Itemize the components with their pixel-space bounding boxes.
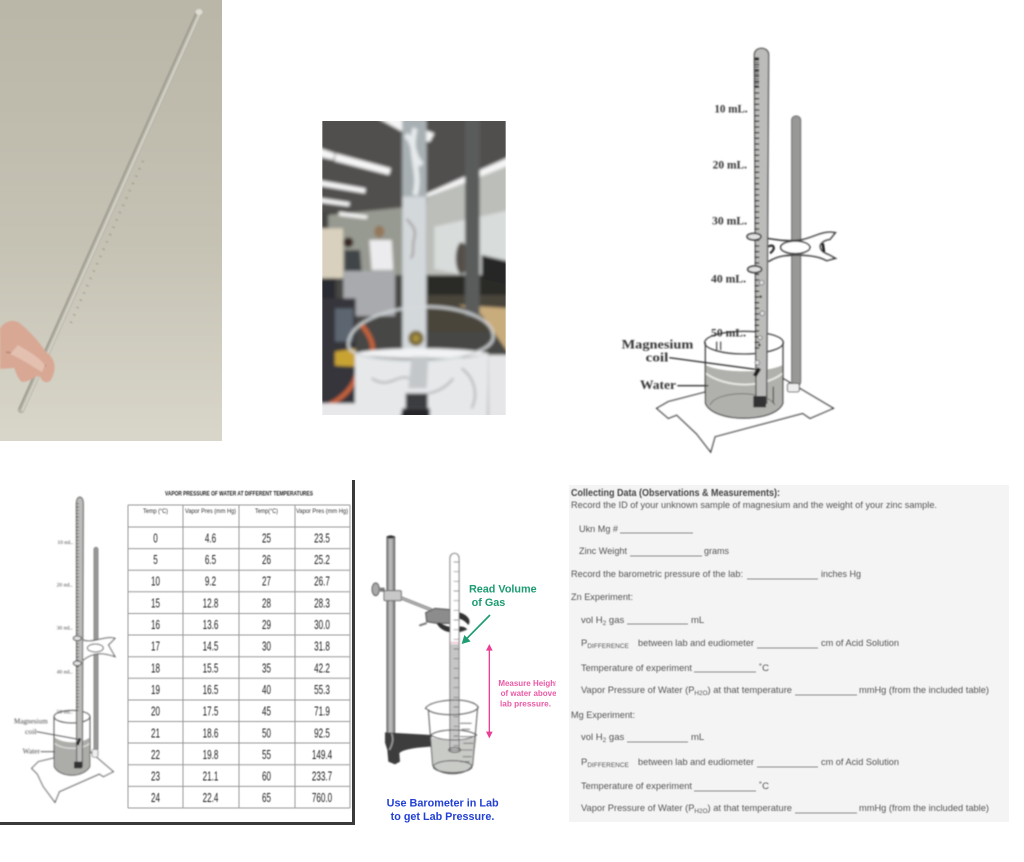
small burette diagram: 20 mL.: [57, 583, 73, 589]
label: magnesium coil and water: [622, 337, 755, 392]
table: vapor pressure of water: 5: [153, 553, 158, 568]
table: vapor pressure of water: 13.6: [203, 618, 219, 633]
table: vapor pressure of water: 40: [262, 683, 271, 698]
panel frame: [0, 480, 354, 824]
small burette diagram: 10 mL.: [57, 540, 74, 546]
small burette diagram: Magnesium: [14, 717, 48, 725]
burette tube: [753, 48, 769, 407]
table: vapor pressure of water: 29: [262, 618, 271, 633]
label: use barometer: [387, 798, 499, 823]
magnesium experiment fields: H2O: [694, 808, 708, 815]
table: vapor pressure of water: 15.5: [203, 662, 219, 676]
small burette diagram: 40 mL.: [57, 669, 73, 675]
magnesium experiment fields: P: [581, 757, 587, 768]
label: read volume of gas: [469, 584, 537, 609]
zinc experiment fields: Temperature of experiment: [581, 663, 692, 674]
zinc experiment fields: P: [581, 638, 587, 649]
label: magnesium coil and water: Water: [640, 378, 676, 392]
hand: [0, 321, 55, 382]
table: vapor pressure of water: 10: [151, 575, 160, 589]
volume labels: 20 mL.: [713, 159, 747, 171]
zinc experiment fields: DIFFERENCE: [587, 643, 630, 650]
magnesium experiment fields: cm of Acid Solution: [821, 757, 899, 768]
table: vapor pressure of water: 35: [262, 662, 271, 676]
zinc experiment fields: H2O: [694, 690, 708, 697]
label: read volume of gas: Read Volume: [469, 584, 537, 596]
zinc experiment fields: vol H: [581, 615, 603, 626]
zinc experiment fields: between lab and eudiometer: [638, 638, 754, 649]
table: vapor pressure of water: 92.5: [314, 727, 330, 741]
table: vapor pressure of water: 149.4: [312, 748, 332, 763]
zinc experiment fields: 2: [603, 620, 607, 627]
table: vapor pressure of water: 6.5: [205, 553, 216, 568]
table: vapor pressure of water: 26.7: [314, 575, 330, 589]
label: use barometer: Use Barometer in Lab: [387, 798, 499, 810]
form heading: Collecting Data (Observations & Measurements):: [571, 488, 780, 499]
volume labels: 40 mL.: [711, 274, 746, 286]
table: vapor pressure of water: 71.9: [314, 705, 330, 719]
magnesium experiment fields: between lab and eudiometer: [638, 757, 754, 768]
panel: collecting data form: [569, 485, 1009, 822]
table: vapor pressure of water: 17.5: [203, 705, 219, 719]
sample fields: [571, 524, 861, 580]
magnesium experiment fields: ˚C: [759, 781, 769, 792]
sample fields: Record the barometric pressure of the lab:: [571, 569, 743, 580]
table: vapor pressure of water: 26: [262, 553, 271, 568]
magnesium experiment fields: mL: [691, 732, 704, 743]
table: vapor pressure of water: 22: [151, 748, 160, 763]
sample fields: grams: [704, 546, 729, 557]
arrow: height of water: [486, 644, 493, 738]
table: vapor pressure of water: 50: [262, 727, 271, 741]
clamp: [747, 232, 835, 273]
label: use barometer: to get Lab Pressure.: [391, 811, 494, 823]
magnesium experiment fields: mmHg (from the included table): [859, 803, 989, 814]
clamp: [372, 583, 470, 633]
table: vapor pressure of water: 233.7: [312, 770, 332, 784]
eudiometer tube: [19, 9, 202, 411]
small burette diagram: [14, 497, 115, 802]
table: vapor pressure of water: 19.8: [203, 748, 219, 763]
table: vapor pressure of water: 4.6: [205, 532, 216, 546]
zinc experiment fields: Vapor Pressure of Water (P: [581, 685, 697, 696]
table: vapor pressure of water: 28.3: [314, 597, 330, 611]
label: measure height of water: of water above: [501, 689, 557, 698]
support rod: [792, 116, 801, 386]
zinc experiment fields: ) at that temperature: [708, 685, 792, 696]
table: vapor pressure of water: 55.3: [314, 683, 330, 698]
label: magnesium coil and water: Magnesium: [622, 337, 694, 351]
ring stand rod: [387, 537, 395, 733]
label: measure height of water: lab pressure.: [500, 700, 551, 709]
magnesium experiment fields: vol H: [581, 732, 603, 743]
panel: apparatus and vapor pressure table: [0, 480, 354, 824]
photo: hand holding eudiometer tube: [0, 0, 227, 446]
label: measure height of water: Measure Height: [498, 679, 558, 688]
table: vapor pressure of water: 0: [153, 532, 158, 546]
eudiometer: [402, 117, 426, 350]
beaker outline: [425, 700, 478, 774]
sample fields: Ukn Mg #: [579, 524, 619, 535]
table: vapor pressure of water: 18.6: [203, 727, 219, 741]
table: vapor pressure of water: 28: [262, 597, 271, 611]
table: vapor pressure of water: 23.5: [314, 532, 330, 546]
beaker: [348, 307, 493, 420]
small burette diagram: 30 mL.: [57, 625, 73, 631]
zinc experiment fields: [571, 592, 989, 697]
table: vapor pressure of water: Temp (°C): [143, 508, 168, 515]
magnesium experiment fields: Temperature of experiment: [581, 781, 692, 792]
zinc experiment fields: mmHg (from the included table): [859, 685, 989, 696]
form instructions: Record the ID of your unknown sample of magnesium and the weight of your zinc sample.: [571, 500, 937, 511]
arrow: read volume: [462, 615, 490, 644]
table: vapor pressure of water: 30.0: [314, 618, 330, 633]
label: measure height of water: [498, 679, 558, 709]
stand foot: [385, 732, 432, 764]
label: read volume of gas: of Gas: [472, 597, 505, 609]
table: vapor pressure of water: Temp(°C): [255, 508, 278, 515]
table: vapor pressure of water: 16: [151, 618, 160, 633]
volume labels: 50 mL.: [711, 328, 746, 340]
small burette diagram: 50 mL.: [57, 709, 73, 715]
table: vapor pressure of water: 18: [151, 662, 160, 676]
zinc experiment fields: ˚C: [759, 663, 769, 674]
gas measuring tube: [449, 553, 461, 752]
table: vapor pressure of water: 16.5: [203, 683, 219, 698]
magnesium experiment fields: Mg Experiment:: [571, 710, 635, 721]
table: vapor pressure of water: 25: [262, 532, 271, 546]
sample fields: Zinc Weight: [579, 546, 627, 557]
table: vapor pressure of water: 30: [262, 640, 271, 654]
table: vapor pressure of water: 27: [262, 575, 271, 589]
zinc experiment fields: cm of Acid Solution: [821, 638, 899, 649]
table: vapor pressure of water: 65: [262, 791, 271, 806]
table: vapor pressure of water: 760.0: [312, 791, 332, 806]
magnesium experiment fields: 2: [603, 737, 607, 744]
table: vapor pressure of water: 12.8: [203, 597, 219, 611]
table: vapor pressure of water: 45: [262, 705, 271, 719]
small burette diagram: Water: [23, 747, 41, 755]
volume labels: [711, 104, 748, 340]
sample fields: inches Hg: [821, 569, 861, 580]
table: vapor pressure of water: 24: [151, 791, 160, 806]
magnesium experiment fields: gas: [606, 732, 624, 743]
zinc experiment fields: mL: [691, 615, 704, 626]
table: vapor pressure of water: 55: [262, 748, 271, 763]
table: vapor pressure of water: 42.2: [314, 662, 330, 676]
table: vapor pressure of water: 60: [262, 770, 271, 784]
table: vapor pressure of water: Vapor Pres (mm Hg): [185, 508, 236, 515]
table: vapor pressure of water: 21.1: [203, 770, 219, 784]
table title: VAPOR PRESSURE OF WATER AT DIFFERENT TEMPERATURES: [165, 490, 313, 498]
table: vapor pressure of water: Vapor Pres (mm Hg): [296, 508, 348, 515]
photo: eudiometer in beaker in the lab: [318, 117, 510, 420]
table: vapor pressure of water: 19: [151, 683, 160, 698]
table: vapor pressure of water: 21: [151, 727, 160, 741]
beaker back and water: [430, 737, 477, 774]
magnesium experiment fields: ) at that temperature: [708, 803, 792, 814]
label: magnesium coil and water: coil: [646, 351, 669, 365]
volume labels: 10 mL.: [714, 104, 748, 116]
diagram: burette with magnesium coil in beaker: [622, 48, 835, 452]
table: vapor pressure of water: 22.4: [203, 791, 219, 806]
zinc experiment fields: gas: [606, 615, 624, 626]
beaker: [705, 331, 783, 418]
zinc experiment fields: Zn Experiment:: [571, 592, 633, 603]
table: vapor pressure of water: 14.5: [203, 640, 219, 654]
magnesium experiment fields: Vapor Pressure of Water (P: [581, 803, 697, 814]
table: vapor pressure of water: 15: [151, 597, 160, 611]
diagram: reading gas volume and lab pressure: [372, 535, 558, 823]
table: vapor pressure of water: 20: [151, 705, 160, 719]
table: vapor pressure of water: 9.2: [205, 575, 216, 589]
magnesium experiment fields: [571, 710, 989, 815]
table: vapor pressure of water: 23: [151, 770, 160, 784]
magnesium experiment fields: DIFFERENCE: [587, 762, 630, 769]
ring stand base: [657, 377, 833, 452]
table: vapor pressure of water: [128, 490, 350, 808]
table: vapor pressure of water: 25.2: [314, 553, 330, 568]
table: vapor pressure of water: 31.8: [314, 640, 330, 654]
small burette diagram: coil: [25, 728, 37, 736]
support rod: [465, 117, 480, 317]
volume labels: 30 mL.: [712, 215, 747, 227]
table: vapor pressure of water: 17: [151, 640, 160, 654]
